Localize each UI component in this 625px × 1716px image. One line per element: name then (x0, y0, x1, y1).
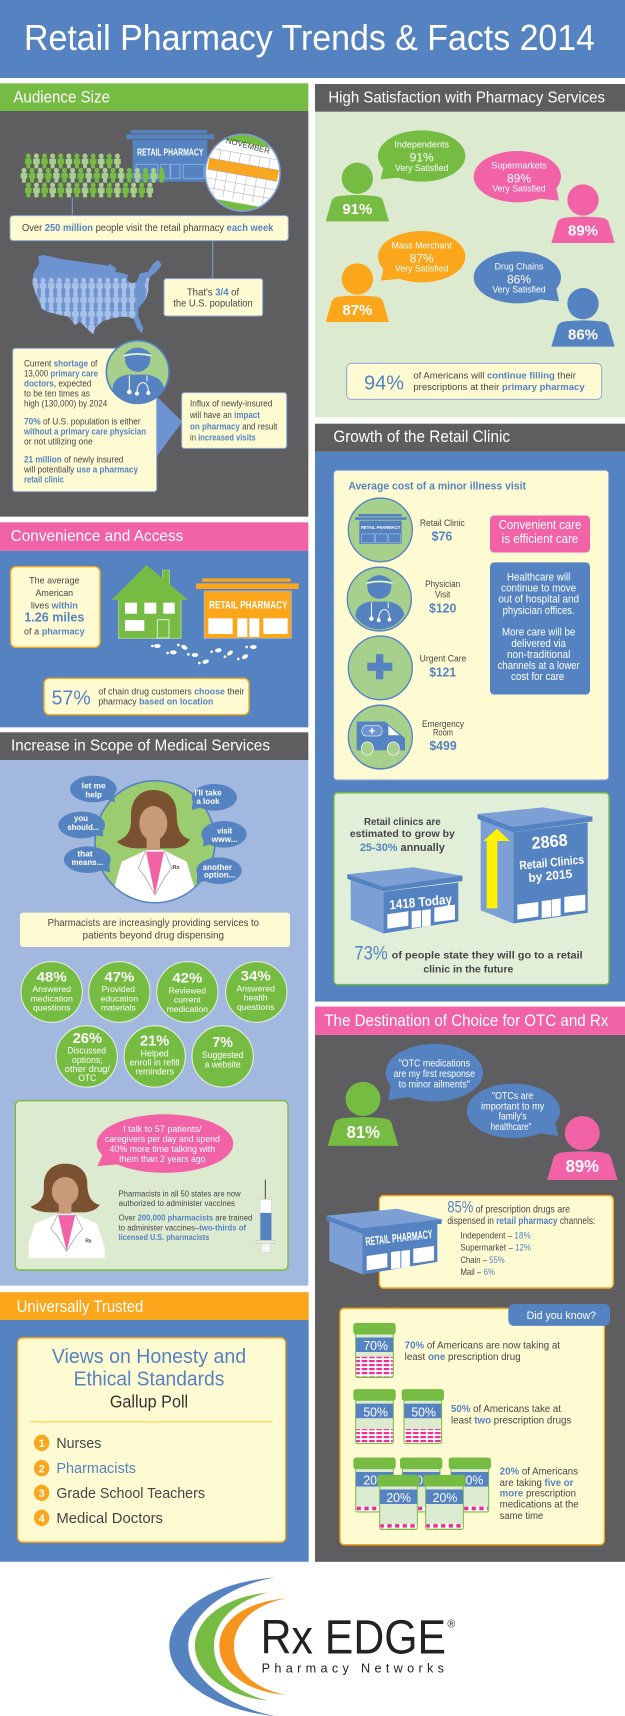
arrow: connector to influx callout (157, 397, 182, 457)
icon: bottles 20 percent: 20% (386, 1491, 411, 1505)
person: independents: 91% (342, 202, 372, 218)
callout: 3/4 of population: the U.S. population (173, 299, 253, 310)
callout: 1.26 miles: 1.26 miles (24, 610, 84, 625)
icon: retail pharmacy building (327, 1209, 442, 1275)
stat: 73 percent: of people state they will go to a retail (392, 950, 583, 962)
text block: doctor shortage: 21 million of newly insured (24, 454, 123, 464)
speech bubble: 57 patients: I talk to 57 patients/ (123, 1124, 202, 1134)
heading: increase in scope (0, 732, 308, 760)
panel: growth of the retail clinic (315, 424, 625, 1002)
person: 89 percent (547, 1116, 618, 1180)
text block: doctor shortage: will potentially use a pharmacy (23, 464, 139, 474)
panel: audience size (0, 83, 308, 517)
callout: healthcare shift: Healthcare will (507, 572, 570, 584)
speech bubble: supermarkets: Supermarkets (491, 160, 547, 170)
speech bubble: drug chains (474, 251, 561, 303)
speech bubble: independents: Very Satisfied (395, 163, 448, 173)
callout: healthcare shift: cost for care (511, 672, 565, 683)
stat circle: 34 percent (226, 962, 287, 1022)
person: drug chains (551, 288, 615, 347)
stat circle: 48 percent: medication (30, 993, 73, 1003)
stat: 70 percent: least one prescription drug (405, 1352, 521, 1363)
card: 85 percent channels: of prescription drugs are (476, 1203, 570, 1214)
icon: retail pharmacy store (126, 130, 214, 182)
stat: 20 percent: same time (500, 1511, 543, 1522)
icon: bottle 70 percent: 70% (363, 1339, 388, 1353)
speech bubble: mass merchant: Mass Merchant (392, 240, 452, 250)
heading: increase in scope: Increase in Scope of Medical Services (11, 738, 270, 755)
cost: retail clinic: $76 (432, 529, 452, 544)
callout: services beyond dispensing: patients beyond drug dispensing (83, 930, 224, 941)
panel: the destination of choice (315, 1007, 625, 1562)
icon: bottles 20 percent: 20% (459, 1473, 483, 1488)
card: average cost: Average cost of a minor illness visit (348, 480, 526, 493)
heading: audience size: Audience Size (13, 88, 110, 107)
speech bubble: mass merchant (378, 231, 465, 282)
poll card: Gallup Poll (110, 1391, 188, 1412)
callout: healthcare shift: delivered via (511, 638, 566, 650)
speech bubbles: pharmacist phrases: let me (82, 780, 106, 790)
speech bubble: first response (386, 1044, 483, 1101)
speech bubble: drug chains: 86% (507, 272, 531, 286)
callout: 1.26 miles: The average (29, 575, 79, 585)
stat: 20 percent: more prescription (500, 1488, 576, 1500)
stat circle: 42 percent: 42% (172, 970, 203, 986)
icon: pharmacist (29, 1164, 105, 1258)
person: supermarkets: 89% (568, 224, 598, 240)
icon: bottles 20 percent: 20% (409, 1473, 434, 1488)
stat: 20 percent: 20% of Americans (500, 1466, 578, 1478)
person: 81 percent (328, 1082, 398, 1146)
heading: growth of the retail clinic (315, 424, 625, 452)
heading: high satisfaction (315, 84, 625, 112)
panel: high satisfaction (315, 84, 625, 417)
callout: 250 million (10, 216, 288, 241)
callout: healthcare shift: continue to move (501, 583, 576, 595)
callout: 94 percent: prescriptions at their primary pharmacy (413, 382, 585, 392)
callout: 94 percent (347, 363, 602, 399)
callout: influx of newly-insured: will have an impact (189, 410, 260, 420)
ranked list: 4 (39, 1513, 45, 1525)
card: 85 percent channels: Chain – 55% (460, 1255, 505, 1265)
ranked list: 3 (39, 1488, 45, 1500)
icon: bottle 70 percent (353, 1323, 396, 1377)
speech bubble: independents: Independents (394, 140, 449, 150)
stat circle: 21 percent (124, 1026, 185, 1087)
stat circle: 26 percent: Discussed (67, 1045, 106, 1056)
cost: emergency room: Emergency (422, 719, 464, 729)
speech bubbles: pharmacist phrases: www... (211, 834, 238, 844)
cost: urgent care: Urgent Care (420, 653, 466, 664)
icon: pharmacist: Rx (85, 1238, 92, 1245)
icon: physician (347, 567, 411, 631)
ranked list: Pharmacists (56, 1461, 136, 1477)
icon: syringe (256, 1180, 275, 1252)
person: supermarkets (551, 184, 615, 243)
ranked list (34, 1435, 205, 1527)
ranked list: Nurses (56, 1436, 101, 1452)
stat circle: 47 percent: materials (101, 1003, 136, 1013)
stat: 73 percent: clinic in the future (423, 964, 514, 976)
panel: vaccines (15, 1101, 288, 1270)
callout: influx of newly-insured: Influx of newly-insured (190, 399, 272, 409)
poll card: Views on Honesty and (52, 1345, 246, 1368)
stat circle: 47 percent: education (100, 993, 139, 1003)
person: drug chains: 86% (568, 327, 598, 343)
icon: retail clinic (348, 498, 412, 562)
stat circle: 42 percent: current (174, 995, 201, 1005)
icon: U.S. map with people (32, 255, 162, 334)
icon: small clinic building: 1418 Today (389, 892, 452, 913)
speech bubbles: pharmacist phrases: that (77, 848, 93, 858)
card: 85 percent channels: Supermarket – 12% (460, 1242, 531, 1253)
stat: 70 percent: 70% of Americans are now taking at (405, 1340, 560, 1351)
card: 85 percent channels: Independent – 18% (460, 1230, 531, 1241)
stat circle: 7 percent: 7% (212, 1034, 233, 1051)
callout: influx of newly-insured: in increased visits (190, 433, 256, 443)
callout: convenient care: Convenient care (499, 517, 581, 532)
stat circle: 48 percent: questions (33, 1003, 70, 1013)
cost: physician visit: Physician (425, 579, 460, 589)
tab: did you know (508, 1304, 610, 1326)
callout: 3/4 of population: That's 3/4 of (187, 287, 239, 298)
callout: convenient care (490, 515, 590, 552)
speech bubble: mass merchant: 87% (410, 251, 434, 265)
speech bubble: family healthcare: family's (499, 1110, 527, 1122)
text block: vaccine authority: Pharmacists in all 50 states are now (119, 1189, 241, 1198)
callout: 250 million: Over 250 million people visit the retail pharmacy each week (22, 223, 274, 234)
panel: increase in scope of medical services (0, 732, 308, 1286)
icon: bottles 50 percent: 50% (411, 1405, 436, 1419)
stat circle: 34 percent: 34% (241, 968, 271, 984)
text block: doctor shortage: or not utilizing one (24, 436, 93, 446)
stat circle: 26 percent: OTC (78, 1073, 96, 1083)
stat circle: 7 percent: a website (205, 1059, 241, 1070)
speech bubbles: pharmacist phrases: option... (204, 870, 235, 880)
text block: growth rate: estimated to grow by (350, 829, 456, 840)
text block: doctor shortage: without a primary care physician (23, 426, 146, 436)
speech bubble: family healthcare: "OTCs are (492, 1090, 533, 1101)
callout: convenient care: is efficient care (502, 531, 578, 546)
logo: Rx EDGE: Rx EDGE (261, 1610, 446, 1664)
stat: 20 percent: are taking five or (500, 1477, 574, 1489)
text block: doctor shortage: to be ten times as (24, 389, 90, 399)
cost: retail clinic (420, 517, 465, 544)
ranked list: 2 (39, 1463, 45, 1476)
title: Retail Pharmacy Trends & Facts 2014 (24, 17, 595, 58)
speech bubble: family healthcare: important to my (481, 1100, 545, 1112)
callout: 94 percent: 94% (364, 371, 404, 394)
heading: convenience and access (0, 522, 308, 551)
stat circle: 7 percent: Suggested (202, 1050, 244, 1060)
icon: november calendar (199, 134, 286, 211)
stat: 50 percent: 50% of Americans take at (451, 1404, 561, 1415)
icon: orange pharmacy: RETAIL PHARMACY (209, 599, 288, 611)
callout: 94 percent: of Americans will continue filling their (413, 371, 576, 381)
text block: vaccine authority: to administer vaccines–two-thirds of (119, 1223, 246, 1232)
cost: emergency room (422, 719, 464, 753)
speech bubbles: pharmacist phrases (58, 776, 247, 884)
stat circle: 47 percent: 47% (104, 969, 135, 985)
ranked list: 1 (39, 1438, 45, 1450)
icon: bottles 50 percent (353, 1389, 444, 1444)
logo: Rx EDGE (169, 1577, 455, 1716)
callout: healthcare shift: physician offices. (503, 605, 575, 617)
card: 85 percent channels (379, 1196, 613, 1288)
icon: large clinic building (478, 807, 592, 924)
callout: 57 percent (44, 678, 249, 715)
speech bubbles: pharmacist phrases: another (203, 862, 233, 872)
ranked list: Medical Doctors (56, 1510, 163, 1527)
icon: retail clinic: RETAIL PHARMACY (361, 525, 400, 530)
card: did you know (340, 1304, 610, 1545)
cost: urgent care (420, 653, 466, 680)
icon: november calendar: NOVEMBER (225, 136, 271, 156)
text block: doctor shortage: doctors, expected (24, 379, 91, 389)
person: 89 percent: 89% (566, 1156, 599, 1176)
icon: ambulance (348, 705, 412, 769)
speech bubble: family healthcare: healthcare" (491, 1121, 531, 1132)
text block: doctor shortage: high (130,000) by 2024 (24, 399, 107, 409)
icon: bottles 50 percent: 50% (363, 1405, 388, 1419)
speech bubble: first response: "OTC medications (399, 1057, 470, 1069)
ranked list: Grade School Teachers (56, 1485, 205, 1502)
icon: retail pharmacy store: RETAIL PHARMACY (137, 147, 204, 158)
icon: large clinic building: 2868 (531, 831, 568, 853)
callout: 1.26 miles: American (35, 588, 73, 598)
panel: universally trusted (0, 1292, 309, 1562)
stat circle: 42 percent: medication (167, 1004, 208, 1014)
stat circle: 48 percent: 48% (37, 969, 67, 985)
logo: Rx EDGE: Pharmacy Networks (262, 1661, 444, 1675)
text block: doctor shortage: 13,000 primary care (24, 369, 98, 379)
callout: 1.26 miles (11, 567, 100, 647)
callout: services beyond dispensing (20, 913, 290, 947)
callout: 1.26 miles: of a pharmacy (24, 627, 85, 637)
speech bubble: 57 patients (97, 1114, 233, 1173)
stat circle: 34 percent: questions (237, 1002, 274, 1012)
heading: high satisfaction: High Satisfaction with Pharmacy Services (328, 90, 605, 107)
speech bubble: 57 patients: them than 2 years ago (119, 1154, 206, 1164)
card: 85 percent channels: Mail – 6% (460, 1267, 495, 1277)
person: 81 percent: 81% (347, 1123, 380, 1142)
panel: convenience and access (0, 522, 308, 727)
text block: vaccine authority: licensed U.S. pharmacists (119, 1233, 210, 1242)
speech bubble: 57 patients: 40% more time talking with (109, 1144, 215, 1154)
callout: services beyond dispensing: Pharmacists are increasingly providing services to (48, 918, 259, 929)
logo: Rx EDGE: ® (447, 1618, 455, 1630)
text block: doctor shortage: retail clinic (24, 474, 64, 484)
stat circle: 48 percent (21, 962, 82, 1022)
text block: doctor shortage: Current shortage of (24, 359, 98, 369)
callout: healthcare shift: More care will be (502, 627, 576, 639)
heading: audience size (0, 83, 308, 111)
speech bubble: first response: are my first response (394, 1068, 475, 1079)
person: mass merchant (326, 263, 389, 322)
card: 85 percent channels: dispensed in retail pharmacy channels: (447, 1215, 595, 1226)
speech bubble: 57 patients: caregivers per day and spend (105, 1134, 220, 1144)
speech bubbles: pharmacist phrases: I'll take (194, 788, 222, 798)
speech bubbles: pharmacist phrases: help (85, 789, 102, 799)
callout: 3/4 of population (164, 279, 263, 316)
stat circle: 48 percent: Answered (32, 984, 71, 994)
icon: bottles 20 percent: 20% (433, 1491, 457, 1505)
speech bubble: family healthcare (467, 1084, 560, 1138)
tab: did you know: Did you know? (527, 1311, 596, 1322)
speech bubbles: pharmacist phrases: should... (67, 822, 99, 832)
stat circle: 26 percent: other drug/ (65, 1064, 111, 1074)
icon: doctor (106, 341, 169, 404)
card: retail clinic growth (334, 793, 609, 985)
stat circle: 26 percent: options; (72, 1055, 103, 1065)
heading: convenience and access: Convenience and Access (11, 528, 183, 545)
text block: vaccine authority: authorized to administer vaccines (119, 1199, 235, 1208)
callout: 57 percent: pharmacy based on location (98, 697, 214, 707)
heading: growth of the retail clinic: Growth of the Retail Clinic (333, 427, 510, 446)
speech bubble: drug chains: Drug Chains (495, 261, 544, 271)
arrow: growth (483, 829, 510, 908)
icon: large clinic building: Retail Clinics (519, 853, 585, 873)
icon: bottles 20 percent (353, 1457, 491, 1529)
callout: healthcare shift: channels at a lower (498, 661, 580, 672)
stat: 73 percent: 73% (354, 942, 388, 964)
stat: 20 percent (500, 1466, 579, 1522)
text block: doctor shortage: 70% of U.S. population is either (24, 416, 141, 426)
speech bubble: supermarkets (474, 151, 561, 202)
cost: emergency room: $499 (429, 738, 457, 753)
stat circle: 21 percent: reminders (135, 1066, 174, 1077)
speech bubble: drug chains: Very Satisfied (492, 285, 546, 295)
person: independents (326, 163, 389, 221)
callout: influx of newly-insured: on pharmacy and result (190, 421, 278, 431)
icon: pharmacist in circle: Rx (172, 865, 180, 871)
icon: pharmacist in circle (95, 781, 215, 903)
connector line (72, 197, 213, 279)
stat circles and vaccine box (15, 1026, 288, 1270)
speech bubble: first response: to minor ailments" (399, 1078, 470, 1089)
stat circle: 26 percent (56, 1026, 117, 1087)
cost: retail clinic: Retail Clinic (420, 517, 465, 528)
text block: vaccine authority: Over 200,000 pharmacists are trained (119, 1213, 252, 1223)
icon: footprints (151, 644, 257, 665)
stat circle: 42 percent: Reviewed (169, 985, 206, 995)
callout: healthcare shift (490, 562, 590, 695)
speech bubble: supermarkets: Very Satisfied (492, 184, 546, 194)
text block: vaccine authority (119, 1189, 252, 1242)
stat circle: 21 percent: Helped (141, 1048, 169, 1058)
text block: growth rate: 25-30% annually (360, 842, 445, 854)
heading: destination of choice (315, 1007, 625, 1035)
callout: 57 percent: 57% (52, 686, 91, 709)
poll card (18, 1338, 286, 1542)
text block: growth rate (350, 817, 456, 854)
text block: doctor shortage (13, 348, 157, 492)
speech bubbles: pharmacist phrases: means... (71, 857, 103, 867)
cost: emergency room: Room (433, 727, 453, 738)
stat circle: 34 percent: Answered (236, 983, 275, 993)
cost: physician visit: $120 (429, 601, 456, 616)
icon: large clinic building: by 2015 (528, 867, 573, 885)
stat: 73 percent (354, 942, 583, 976)
person: mass merchant: 87% (342, 303, 372, 319)
heading: universally trusted (0, 1292, 309, 1320)
icon: orange pharmacy (196, 578, 299, 638)
stat: 50 percent (451, 1404, 571, 1426)
callout: 57 percent: of chain drug customers choose their (98, 686, 244, 696)
speech bubbles: pharmacist phrases: you (74, 813, 88, 823)
stat circle: 21 percent: 21% (140, 1033, 169, 1050)
stat: 20 percent: medications at the (500, 1499, 579, 1511)
icon: crowd of people (21, 153, 165, 197)
cost: physician visit (425, 579, 460, 616)
heading: universally trusted: Universally Trusted (17, 1299, 143, 1316)
stat circle: 47 percent: Provided (102, 984, 135, 994)
card: 85 percent channels: 85% (447, 1198, 473, 1217)
speech bubble: independents: 91% (410, 151, 434, 165)
stat circle: 21 percent: enroll in refill (130, 1057, 180, 1067)
poll card: Ethical Standards (74, 1368, 224, 1391)
icon: bottles 20 percent: 20% (363, 1473, 388, 1488)
icon: house (112, 565, 188, 638)
stat circle: 7 percent (192, 1026, 253, 1087)
callout: healthcare shift: non-traditional (507, 649, 570, 661)
title banner (0, 0, 625, 78)
stat: 50 percent: least two prescription drugs (451, 1415, 571, 1426)
stat circle: 26 percent: 26% (73, 1030, 102, 1047)
speech bubble: mass merchant: Very Satisfied (395, 264, 448, 274)
icon: urgent care cross (348, 636, 412, 700)
heading: destination of choice: The Destination of Choice for OTC and Rx (324, 1012, 608, 1030)
card: average cost (334, 470, 609, 780)
stat circle: 42 percent (157, 962, 218, 1022)
callout: influx of newly-insured (182, 393, 287, 448)
cost: physician visit: Visit (435, 589, 451, 600)
speech bubbles: pharmacist phrases: visit (217, 825, 232, 835)
speech bubble: independents (378, 130, 465, 182)
stat circle: 34 percent: health (244, 993, 268, 1003)
icon: retail pharmacy building: RETAIL PHARMACY (365, 1229, 433, 1249)
stat: 70 percent (405, 1340, 560, 1363)
stat circle: 47 percent (89, 962, 150, 1022)
callout: healthcare shift: out of hospital and (498, 594, 579, 606)
speech bubble: supermarkets: 89% (507, 171, 531, 185)
cost: urgent care: $121 (429, 665, 456, 680)
icon: small clinic building (347, 867, 462, 934)
text block: growth rate: Retail clinics are (364, 817, 441, 828)
speech bubbles: pharmacist phrases: a look (196, 796, 220, 806)
callout: 1.26 miles: lives within (31, 601, 78, 611)
